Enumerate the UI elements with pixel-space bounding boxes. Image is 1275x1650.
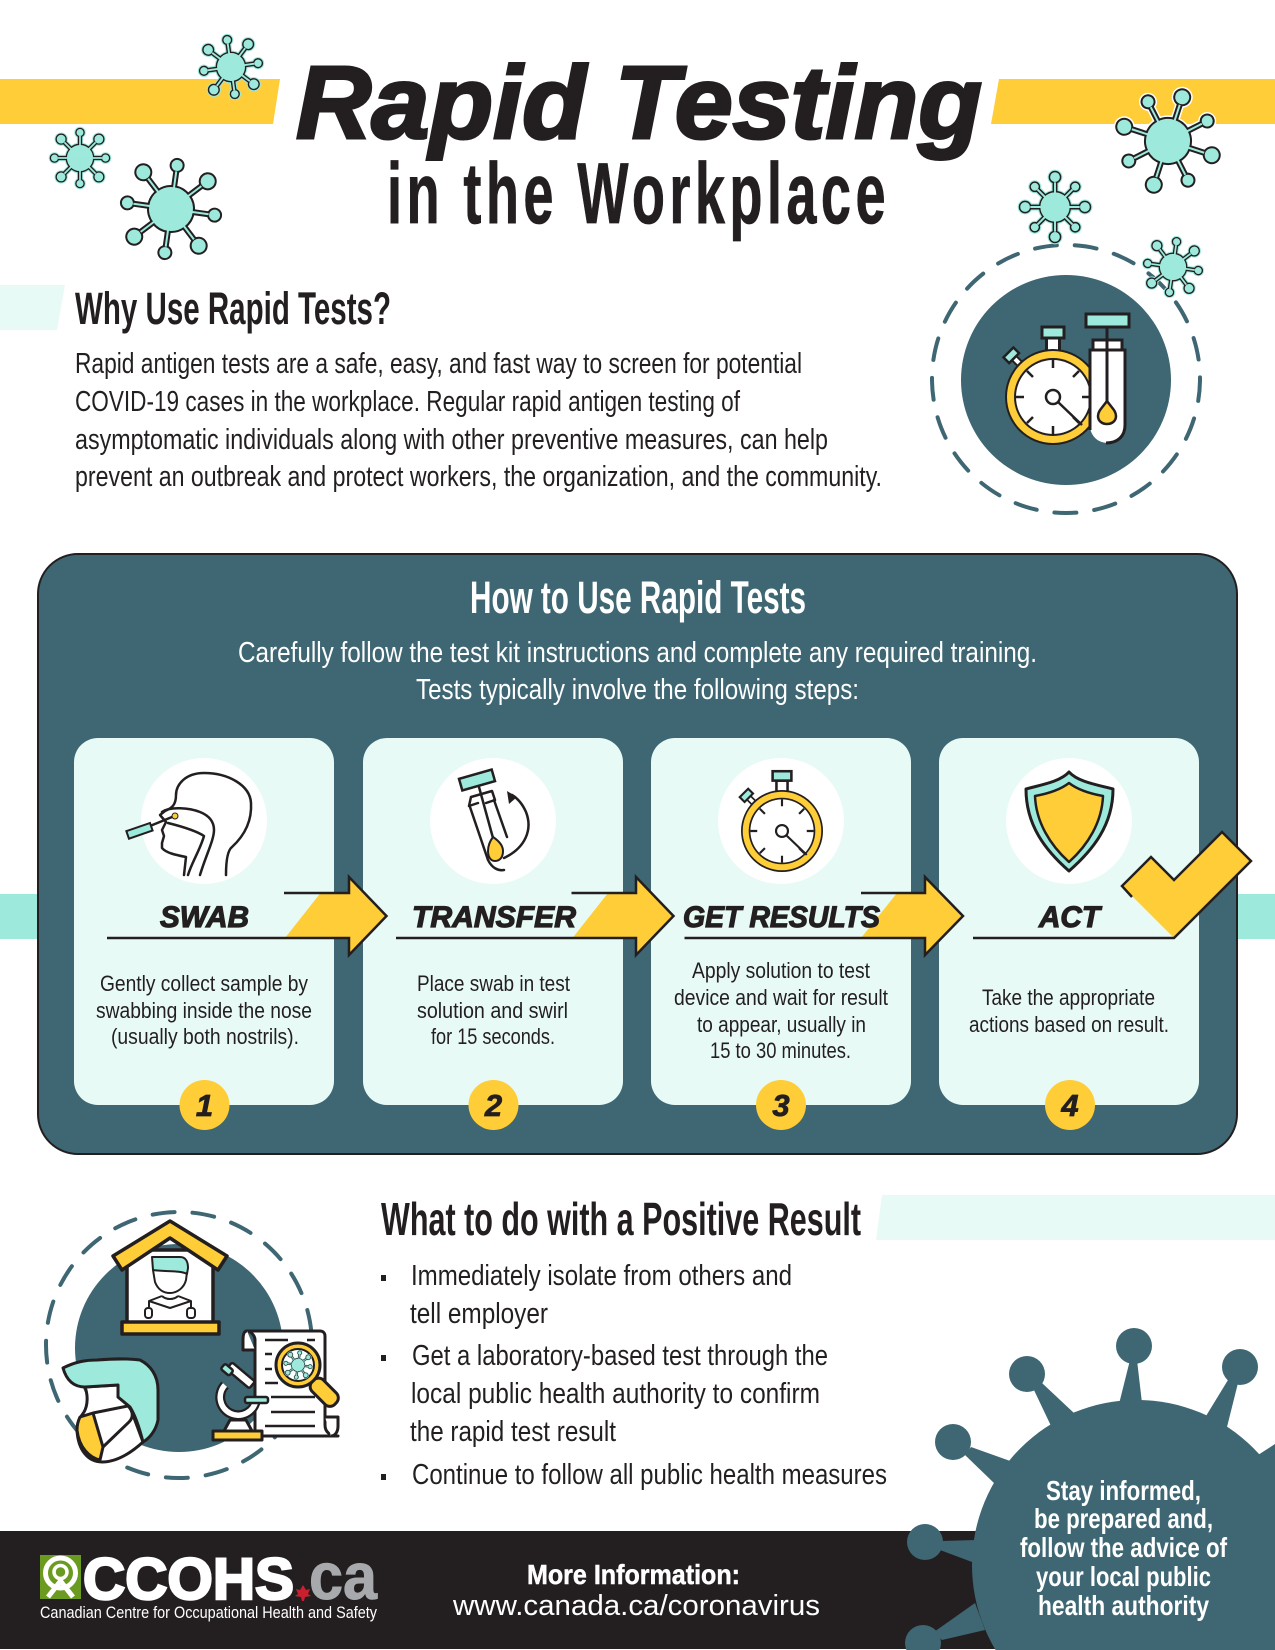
step 2 description: for 15 seconds. <box>431 1024 555 1049</box>
why section paragraph: asymptomatic individuals along with other preventive measures, can help <box>75 424 828 456</box>
logo tagline: Canadian Centre for Occupational Health and Safety <box>40 1603 377 1622</box>
callout text: health authority <box>1038 1590 1209 1621</box>
icon: microscope <box>213 1362 268 1440</box>
why section accent <box>0 285 65 330</box>
right yellow title bar <box>991 79 1275 124</box>
more information label: More Information: <box>527 1559 740 1590</box>
step 2 description: Place swab in test <box>417 971 571 996</box>
step title: act: ACT <box>1038 901 1103 934</box>
icon: virus above dashed circle <box>1010 162 1100 252</box>
step 1 description: Gently collect sample by <box>100 971 309 996</box>
logo wordmark CCOHS: CCOHS <box>83 1547 294 1612</box>
icon: check mark <box>973 832 1251 938</box>
callout text: Stay informed, <box>1046 1475 1201 1506</box>
step 3 description <box>674 958 889 1063</box>
step number 1: 1 <box>196 1088 213 1123</box>
accent: positive result heading band <box>876 1195 1275 1240</box>
callout text: be prepared and, <box>1034 1503 1213 1534</box>
step 3 description: to appear, usually in <box>697 1012 866 1037</box>
left mint band <box>0 894 40 939</box>
positive result bullet list: Get a laboratory-based test through the <box>412 1340 828 1372</box>
step 3 description: device and wait for result <box>674 985 889 1010</box>
heading: why use rapid tests: Why Use Rapid Tests? <box>75 283 391 334</box>
step 2 description: solution and swirl <box>417 998 568 1023</box>
why section paragraph: Rapid antigen tests are a safe, easy, and fast way to screen for potential <box>75 348 802 380</box>
step 1 description <box>96 971 312 1049</box>
step 1 description: (usually both nostrils). <box>111 1024 299 1049</box>
icon: person with face shield and mask <box>63 1359 158 1462</box>
logo wordmark ca: ca <box>309 1539 378 1613</box>
footer bar <box>0 1531 1275 1649</box>
heading: what to do with a positive result: What to do with a Positive Result <box>381 1193 861 1245</box>
callout text <box>1020 1475 1228 1621</box>
card 3: get results background <box>651 738 911 1105</box>
step 1 description: swabbing inside the nose <box>96 998 312 1023</box>
step 3 description: 15 to 30 minutes. <box>710 1038 851 1063</box>
step number 4: 4 <box>1060 1088 1079 1123</box>
icon: stopwatch <box>718 758 844 884</box>
step number 3: 3 <box>772 1088 790 1123</box>
positive result bullet list: Immediately isolate from others and <box>411 1260 792 1292</box>
step 4 description: Take the appropriate <box>982 985 1155 1010</box>
icon: swab in tube with swirl arrow <box>430 758 556 884</box>
icon: small virus left <box>52 130 108 186</box>
step 2 description <box>417 971 571 1049</box>
icon: swabbing head <box>126 758 267 884</box>
icon: shield <box>1006 758 1132 884</box>
arrow: swab to transfer <box>107 877 386 955</box>
icon: document with magnifier <box>243 1331 341 1436</box>
positive result bullet list: Continue to follow all public health measures <box>412 1459 887 1491</box>
right mint band <box>1235 894 1275 939</box>
callout text: follow the advice of <box>1020 1532 1228 1563</box>
card 2: transfer background <box>363 738 623 1105</box>
title: Rapid Testing: Rapid Testing <box>296 45 982 160</box>
icon: virus on left bar <box>197 33 265 101</box>
why section paragraph: prevent an outbreak and protect workers, the organization, and the community. <box>75 461 882 493</box>
step number 4 <box>1045 1080 1095 1130</box>
panel intro text: Tests typically involve the following steps: <box>416 674 859 706</box>
icon: virus on dashed circle <box>1141 235 1205 299</box>
positive result bullet list: the rapid test result <box>410 1416 616 1448</box>
arrow: get results to act <box>684 877 963 955</box>
step 4 description: actions based on result. <box>969 1012 1169 1037</box>
step 3 description: Apply solution to test <box>692 958 871 983</box>
icon: large virus left <box>116 154 226 264</box>
step number 1 <box>180 1080 230 1130</box>
callout text: your local public <box>1036 1561 1211 1592</box>
left yellow title bar <box>0 79 280 124</box>
arrow: transfer to get results <box>396 877 674 955</box>
icon group: isolation, face shield and lab test <box>46 1212 341 1478</box>
icon: person at home <box>113 1221 227 1334</box>
positive result bullet list: tell employer <box>410 1298 548 1330</box>
panel: how to use rapid tests <box>38 554 1251 1154</box>
step title: get results: GET RESULTS <box>683 901 880 934</box>
subtitle: in the Workplace: in the Workplace <box>387 146 890 242</box>
step title: swab: SWAB <box>160 901 249 934</box>
large virus callout <box>905 1328 1275 1650</box>
more information url: www.canada.ca/coronavirus <box>452 1590 820 1622</box>
why section paragraph: COVID-19 cases in the workplace. Regular rapid antigen testing of <box>75 386 741 418</box>
CCOHS logo <box>40 1539 378 1622</box>
positive result bullet list: local public health authority to confirm <box>411 1378 820 1410</box>
positive result bullet list <box>381 1260 887 1491</box>
why section paragraph <box>75 348 882 493</box>
icon: large virus right <box>1103 76 1233 206</box>
card 4: act background <box>939 738 1199 1105</box>
icon: stopwatch and test tube in dashed circle <box>932 245 1200 513</box>
step number 2: 2 <box>484 1088 502 1123</box>
logo maple leaf <box>295 1585 311 1601</box>
step title: transfer: TRANSFER <box>412 901 576 934</box>
step number 3 <box>756 1080 806 1130</box>
panel intro text: Carefully follow the test kit instructions and complete any required training. <box>238 637 1037 669</box>
step number 2 <box>468 1080 518 1130</box>
logo mark <box>40 1555 81 1599</box>
panel intro text <box>238 637 1037 706</box>
card 1: swab background <box>74 738 334 1105</box>
heading: how to use rapid tests: How to Use Rapid Tests <box>470 572 806 623</box>
step 4 description <box>969 985 1169 1037</box>
